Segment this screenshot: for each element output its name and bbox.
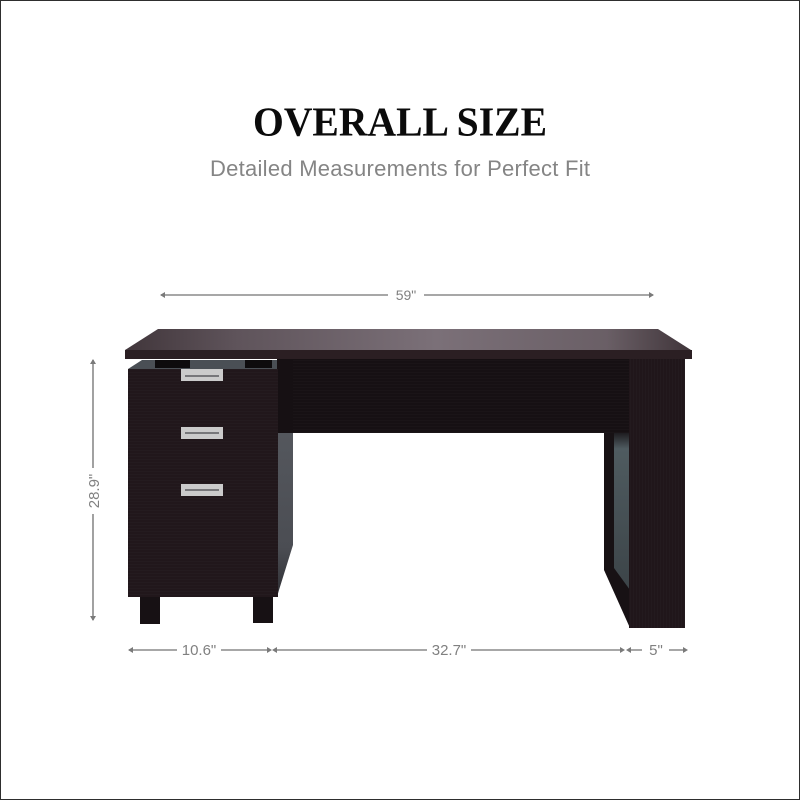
icon: desk illustration — [125, 329, 692, 628]
dimension: pedestal width 10.6 inches: 10.6" — [182, 642, 216, 659]
drawer handle 2 — [181, 427, 223, 439]
dimension: opening width 32.7 inches — [272, 642, 625, 659]
drawer handle 1 — [181, 369, 223, 381]
drawer handle 3 — [181, 484, 223, 496]
right leg inner — [604, 433, 630, 628]
desk top surface — [125, 329, 691, 350]
right leg front — [629, 359, 685, 628]
modesty panel — [277, 359, 629, 433]
subtitle: Detailed Measurements for Perfect Fit — [210, 156, 590, 181]
dimension: opening width 32.7 inches: 32.7" — [432, 642, 466, 659]
desk top front edge — [125, 350, 692, 359]
dimension: height 28.9 inches — [86, 359, 103, 621]
dimension: overall width 59 inches: 59" — [396, 287, 416, 303]
dimension: pedestal width 10.6 inches — [128, 642, 272, 659]
dimension: leg width 5 inches: 5" — [649, 642, 663, 659]
title: OVERALL SIZE — [253, 98, 547, 144]
dimension: leg width 5 inches — [626, 642, 688, 659]
pedestal front — [128, 369, 278, 597]
dimension: height 28.9 inches: 28.9" — [86, 474, 103, 508]
dimension: overall width 59 inches — [160, 287, 654, 303]
pedestal legs — [140, 597, 273, 624]
pedestal side — [277, 433, 293, 597]
pedestal shadow strip under top — [128, 360, 277, 369]
